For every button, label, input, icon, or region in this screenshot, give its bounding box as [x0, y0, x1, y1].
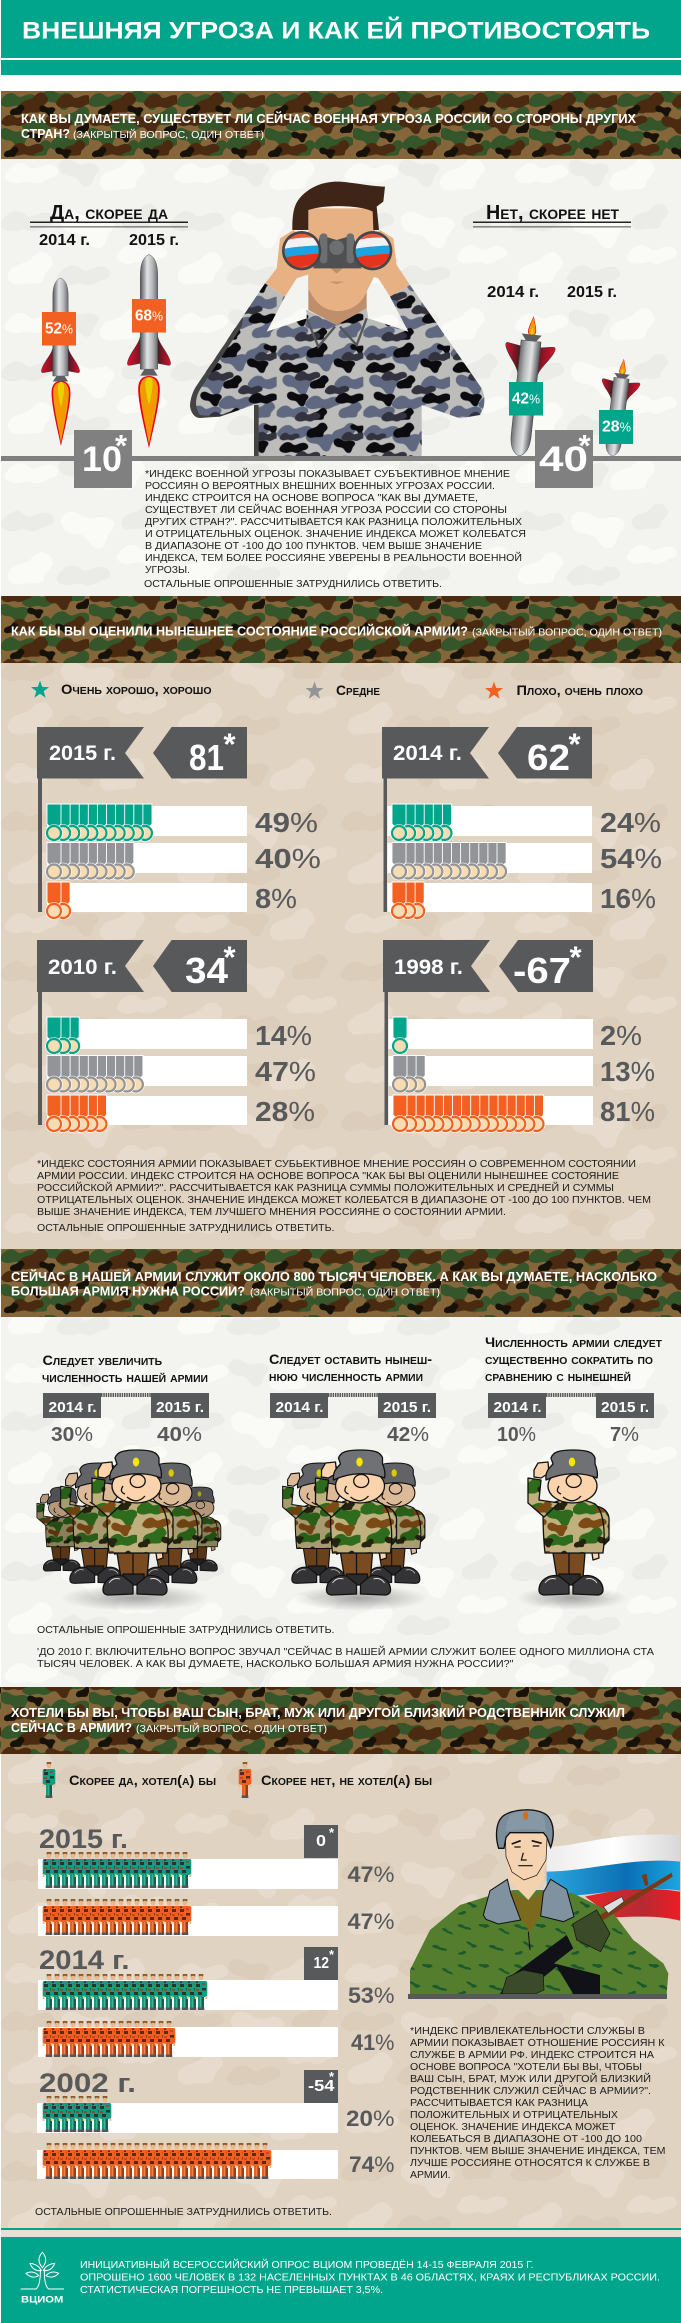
chart: 1998 rating: 2% — [600, 1020, 642, 1051]
soldiers group: three soldiers — [283, 1450, 428, 1611]
legend: no — [239, 1762, 432, 1798]
column: keep army: нюю численность армии — [269, 1368, 423, 1384]
chart: 2015 relative serving: * — [329, 1825, 335, 1840]
section 1 camouflage heading band: КАК ВЫ ДУМАЕТЕ, СУЩЕСТВУЕТ ЛИ СЕЙЧАС ВОЕННАЯ УГРОЗА РОССИИ СО СТОРОНЫ ДРУГИХ — [21, 111, 636, 126]
footnote: army index: АРМИИ РОССИИ. ИНДЕКС СТРОИТСЯ НА ОСНОВЕ ВОПРОСА "КАК БЫ ВЫ ОЦЕНИЛИ НЫНЕШНЕЕ СОСТОЯНИЕ — [37, 1171, 619, 1182]
footnote: threat index: И ОТРИЦАТЕЛЬНЫХ ОЦЕНОК. ЗНАЧЕНИЕ ИНДЕКСА МОЖЕТ КОЛЕБАТСЯ — [145, 529, 526, 540]
footnote: army size — [37, 1625, 654, 1670]
answer heading: yes: 2015 г. — [129, 232, 179, 249]
footnote: threat index: ИНДЕКС СТРОИТСЯ НА ОСНОВЕ ВОПРОСА "КАК ВЫ ДУМАЕТЕ, — [145, 493, 478, 504]
footnote: attractiveness index: ОЦЕНОК. ЗНАЧЕНИЕ ИНДЕКСА МОЖЕТ — [410, 2122, 616, 2133]
footnote: threat index: РОССИЯН О ВЕРОЯТНЫХ ВНЕШНИХ ВОЕННЫХ УГРОЗАХ РОССИИ. — [145, 481, 495, 492]
footer — [1, 2228, 681, 2323]
chart: 2010 rating: 14% — [255, 1020, 312, 1051]
section 1 camouflage heading band — [1, 91, 681, 159]
survey information: СТАТИСТИЧЕСКАЯ ПОГРЕШНОСТЬ НЕ ПРЕВЫШАЕТ 3,5%. — [80, 2284, 383, 2296]
rocket 2015 no 28% — [593, 356, 643, 458]
panel: section 4 relative serving — [0, 1687, 681, 2228]
column: reduce army: существенно сократить по — [485, 1351, 653, 1367]
footnote: threat index: УГРОЗЫ. — [145, 565, 190, 576]
footnote: army index: ВЫШЕ ЗНАЧЕНИЕ ИНДЕКСА, ТЕМ ЛУЧШЕГО МНЕНИЯ РОССИЯНЕ О СОСТОЯНИИ АРМИИ. — [37, 1207, 506, 1218]
chart: 2015 relative serving: 2015 г. — [39, 1824, 128, 1854]
footnote: attractiveness index: ПУНКТОВ. ЧЕМ ВЫШЕ ЗНАЧЕНИЕ ИНДЕКСА, ТЕМ — [410, 2146, 666, 2157]
section 4 camouflage heading band — [0, 1687, 681, 1754]
column: reduce army: Численность армии следует — [485, 1334, 662, 1350]
footnote: army index — [37, 1159, 651, 1234]
chart: 2014 rating: 24% — [600, 807, 661, 838]
section 3 camouflage heading band: СЕЙЧАС В НАШЕЙ АРМИИ СЛУЖИТ ОКОЛО 800 ТЫСЯЧ ЧЕЛОВЕК. А КАК ВЫ ДУМАЕТЕ, НАСКОЛЬКО — [11, 1269, 657, 1284]
chart: 2014 relative serving: 53% — [348, 1983, 394, 2008]
survey information — [80, 2258, 660, 2296]
footnote: army index: ОТРИЦАТЕЛЬНЫХ ОЦЕНОК. ЗНАЧЕНИЕ ИНДЕКСА МОЖЕТ КОЛЕБАТСЯ В ДИАПАЗОНЕ ОТ -100 ДО 100 ПУНКТОВ. ЧЕМ — [37, 1195, 651, 1206]
column: increase army: 40% — [157, 1424, 202, 1446]
column: increase army: 2015 г. — [156, 1399, 204, 1416]
header banner — [1, 0, 681, 75]
chart: 2015 rating: 2015 г. — [49, 742, 116, 765]
medals row: good 14% — [46, 1017, 81, 1054]
chart: 2015 relative serving: 47% — [348, 1909, 394, 1934]
chart: 2015 relative serving: 47% — [348, 1862, 394, 1887]
footnote: attractiveness index: АРМИИ. — [410, 2170, 450, 2181]
footnote: army index: *ИНДЕКС СОСТОЯНИЯ АРМИИ ПОКАЗЫВАЕТ СУБЬЕКТИВНОЕ МНЕНИЕ РОССИЯН О СОВРЕМЕННОМ СОСТОЯНИИ — [37, 1159, 636, 1170]
legend: army rating: Средне — [336, 682, 380, 698]
footnote: army size: ОСТАЛЬНЫЕ ОПРОШЕННЫЕ ЗАТРУДНИЛИСЬ ОТВЕТИТЬ. — [37, 1625, 334, 1636]
medals row: good 24% — [390, 804, 453, 842]
illustration: soldier with flag and rifle — [410, 1810, 680, 1994]
people row: no 47% — [43, 1899, 191, 1935]
icon: VCIOM logo — [21, 2252, 64, 2304]
footnote: attractiveness index — [410, 2026, 666, 2181]
column: keep army — [269, 1351, 436, 1446]
chart: 2015 rating — [37, 726, 321, 920]
chart: 2014 relative serving: 12 — [314, 1955, 329, 1972]
logo wordmark: ВЦИОМ — [21, 2294, 63, 2304]
chart: 2010 rating: 2010 г. — [48, 956, 117, 979]
survey information: ИНИЦИАТИВНЫЙ ВСЕРОССИЙСКИЙ ОПРОС ВЦИОМ ПРОВЕДЁН 14-15 ФЕВРАЛЯ 2015 Г. — [80, 2258, 534, 2271]
chart: 2002 relative serving: 2002 г. — [39, 2068, 136, 2098]
title: ВНЕШНЯЯ УГРОЗА И КАК ЕЙ ПРОТИВОСТОЯТЬ — [22, 16, 650, 44]
footnote: threat index: ДРУГИХ СТРАН?". РАССЧИТЫВАЕТСЯ КАК РАЗНИЦА ПОЛОЖИТЕЛЬНЫХ — [145, 517, 522, 528]
chart: 2014 rating — [382, 726, 662, 920]
column: increase army: 2014 г. — [48, 1399, 96, 1416]
chart: 2014 rating: 2014 г. — [393, 742, 462, 765]
column: increase army: Следует увеличить — [42, 1352, 162, 1368]
column: reduce army: 7% — [610, 1424, 639, 1446]
rocket 2015 yes 68%: 68% — [135, 308, 163, 324]
illustration: man with binoculars — [190, 182, 484, 456]
chart: 1998 rating: 81% — [600, 1096, 655, 1127]
chart: 2015 rating: 81 — [189, 737, 224, 778]
chart: 2014 relative serving: 2014 г. — [39, 1945, 130, 1975]
footnote: attractiveness index: РАССЧИТЫВАЕТСЯ КАК РАЗНИЦА — [410, 2098, 588, 2109]
panel: section 1 military threat — [1, 91, 681, 596]
footnote: threat index: СУЩЕСТВУЕТ ЛИ СЕЙЧАС ВОЕННАЯ УГРОЗА РОССИИ СО СТОРОНЫ — [145, 503, 507, 516]
answer heading: no — [473, 202, 631, 301]
medals row: good 49% — [46, 804, 154, 842]
people row: no 74% — [43, 2143, 271, 2179]
medals row: bad 16% — [390, 882, 426, 920]
section 3 camouflage heading band — [1, 1249, 681, 1317]
column: keep army: 42% — [387, 1424, 429, 1446]
chart: 2014 relative serving: 41% — [351, 2030, 394, 2055]
legend: no: Скорее нет, не хотел(а) бы — [261, 1772, 432, 1788]
footnote: threat index: *ИНДЕКС ВОЕННОЙ УГРОЗЫ ПОКАЗЫВАЕТ СУБЪЕКТИВНОЕ МНЕНИЕ — [145, 467, 510, 480]
section 1 camouflage heading band: СТРАН? — [21, 126, 70, 141]
medals row: bad 81% — [392, 1095, 545, 1132]
survey information: ОПРОШЕНО 1600 ЧЕЛОВЕК В 132 НАСЕЛЕННЫХ ПУНКТАХ В 46 ОБЛАСТЯХ, КРАЯХ И РЕСПУБЛИКАХ РОССИИ. — [80, 2272, 660, 2284]
section 4 camouflage heading band: СЕЙЧАС В АРМИИ? — [11, 1720, 132, 1735]
medals row: average 40% — [46, 842, 135, 880]
chart: 2015 rating: 40% — [255, 843, 321, 874]
people row: yes 20% — [43, 2096, 111, 2132]
footnote: threat index — [144, 467, 526, 590]
chart: 2010 rating: 28% — [255, 1096, 315, 1127]
medals row: average 47% — [46, 1056, 144, 1093]
index box 40 — [535, 428, 593, 488]
chart: 2015 rating: 8% — [255, 883, 297, 914]
footnote: attractiveness index: ВАШ СЫН, БРАТ, МУЖ ИЛИ ДРУГОЙ БЛИЗКИЙ — [410, 2072, 651, 2085]
answer heading: no: 2014 г. — [487, 284, 539, 301]
chart: 2014 rating: 16% — [600, 883, 656, 914]
chart: 2010 rating: 34 — [185, 950, 228, 991]
chart: 2002 relative serving: 20% — [346, 2106, 394, 2131]
panel: section 2 army condition — [1, 596, 681, 1249]
legend: army rating: Очень хорошо, хорошо — [61, 681, 212, 697]
chart: 2002 relative serving — [37, 2068, 394, 2179]
column: increase army: численность нашей армии — [42, 1369, 208, 1385]
chart: 1998 rating: -67 — [513, 950, 571, 991]
rocket 2015 no 28%: 28% — [602, 418, 631, 436]
rocket 2015 yes 68% — [127, 254, 171, 448]
footnote: attractiveness index: *ИНДЕКС ПРИВЛЕКАТЕЛЬНОСТИ СЛУЖБЫ В — [410, 2026, 645, 2037]
rocket 2014 yes 52%: 52% — [45, 320, 73, 338]
medals row: bad 28% — [46, 1095, 108, 1132]
chart: 2015 rating: 49% — [255, 807, 318, 838]
chart: 1998 rating — [383, 940, 655, 1132]
section 2 camouflage heading band — [1, 596, 681, 663]
footnote: attractiveness index: РОДСТВЕННИК СЛУЖИЛ СЕЙЧАС В АРМИИ?". — [410, 2084, 651, 2097]
index box 10: * — [115, 428, 128, 463]
medals row: good 2% — [392, 1017, 408, 1054]
footnote: attractiveness index: ОСНОВЕ ВОПРОСА "ХОТЕЛИ БЫ ВЫ, ЧТОБЫ — [410, 2062, 642, 2073]
legend: army rating — [31, 680, 643, 699]
people row: yes 47% — [43, 1852, 191, 1888]
column: reduce army: 10% — [497, 1424, 536, 1446]
footnote: army index: РОССИЙСКОЙ АРМИИ?". РАССЧИТЫВАЕТСЯ КАК РАЗНИЦА СУММЫ ПОЛОЖИТЕЛЬНЫХ И СРЕДНЕЙ И СУММЫ — [37, 1181, 614, 1194]
index box 40: * — [578, 428, 592, 463]
chart: 2002 relative serving: * — [329, 2069, 335, 2084]
medals row: average 13% — [392, 1056, 427, 1093]
column: keep army: Следует оставить нынеш- — [269, 1351, 432, 1367]
chart: 2002 relative serving: -54 — [308, 2078, 335, 2095]
column: reduce army: 2014 г. — [494, 1399, 542, 1416]
column: increase army: 30% — [51, 1424, 93, 1446]
chart: 2014 relative serving: * — [329, 1947, 335, 1962]
footnote: attractiveness index: АРМИИ ПОКАЗЫВАЕТ ОТНОШЕНИЕ РОССИЯН К — [410, 2038, 665, 2049]
note: remaining respondents: ОСТАЛЬНЫЕ ОПРОШЕННЫЕ ЗАТРУДНИЛИСЬ ОТВЕТИТЬ. — [35, 2207, 332, 2218]
ground line — [1, 456, 681, 461]
rocket 2014 yes 52% — [41, 278, 80, 446]
chart: 2002 relative serving: 74% — [349, 2152, 394, 2177]
chart: 2015 relative serving: 0 — [316, 1833, 326, 1850]
medals row: average 54% — [390, 842, 508, 880]
column: reduce army — [485, 1334, 662, 1446]
footnote: army size: ТЫСЯЧ ЧЕЛОВЕК. А КАК ВЫ ДУМАЕТЕ, НАСКОЛЬКО БОЛЬШАЯ АРМИЯ НУЖНА РОССИИ?" — [37, 1659, 514, 1670]
chart: 2014 rating: * — [568, 726, 582, 762]
section 3 camouflage heading band: (ЗАКРЫТЫЙ ВОПРОС, ОДИН ОТВЕТ) — [250, 1286, 440, 1298]
footnote: attractiveness index: КОЛЕБАТЬСЯ В ДИАПАЗОНЕ ОТ -100 ДО 100 — [410, 2134, 642, 2145]
chart: 1998 rating: * — [570, 940, 582, 974]
answer heading: no: 2015 г. — [567, 284, 617, 301]
section 2 camouflage heading band: (ЗАКРЫТЫЙ ВОПРОС, ОДИН ОТВЕТ) — [472, 626, 662, 638]
column: reduce army: сравнению с нынешней — [485, 1368, 631, 1384]
chart: 2010 rating — [37, 940, 316, 1132]
answer heading: yes: 2014 г. — [39, 232, 90, 249]
panel: section 3 army size — [1, 1249, 681, 1687]
footnote: attractiveness index: ПОЛОЖИТЕЛЬНЫХ И ОТРИЦАТЕЛЬНЫХ — [410, 2110, 618, 2121]
rocket 2014 no 42% — [494, 313, 558, 459]
chart: 1998 rating: 13% — [600, 1056, 655, 1087]
index box 10: 10 — [82, 440, 122, 479]
legend: yes — [43, 1762, 216, 1798]
footnote: attractiveness index: СЛУЖБЕ В АРМИИ РФ. ИНДЕКС СТРОИТСЯ НА — [410, 2050, 654, 2061]
footnote: army index: ОСТАЛЬНЫЕ ОПРОШЕННЫЕ ЗАТРУДНИЛИСЬ ОТВЕТИТЬ. — [37, 1223, 334, 1234]
footnote: threat index: ИНДЕКСА, ТЕМ БОЛЕЕ РОССИЯНЕ УВЕРЕНЫ В РЕАЛЬНОСТИ ВОЕННОЙ — [145, 551, 522, 564]
chart: 2014 rating: 62 — [527, 737, 570, 778]
people row: yes 53% — [43, 1974, 207, 2010]
footnote: army size: 'ДО 2010 Г. ВКЛЮЧИТЕЛЬНО ВОПРОС ЗВУЧАЛ "СЕЙЧАС В НАШЕЙ АРМИИ СЛУЖИТ БОЛЕЕ ОДНОГО МИЛЛИОНА СТА — [37, 1645, 654, 1658]
section 4 camouflage heading band: ХОТЕЛИ БЫ ВЫ, ЧТОБЫ ВАШ СЫН, БРАТ, МУЖ ИЛИ ДРУГОЙ БЛИЗКИЙ РОДСТВЕННИК СЛУЖИЛ — [11, 1705, 625, 1720]
people row: no 41% — [43, 2021, 175, 2057]
rocket 2014 no 42%: 42% — [512, 390, 540, 408]
ledge below soldier — [408, 1994, 667, 1999]
column: keep army: 2015 г. — [383, 1399, 431, 1416]
section 3 camouflage heading band: БОЛЬШАЯ АРМИЯ НУЖНА РОССИИ? — [11, 1284, 245, 1298]
legend: yes: Скорее да, хотел(а) бы — [69, 1772, 216, 1788]
column: reduce army: 2015 г. — [601, 1399, 649, 1416]
soldiers group: five soldiers — [37, 1450, 221, 1611]
index box 40: 40 — [539, 440, 588, 479]
column: increase army — [42, 1352, 209, 1446]
medals row: bad 8% — [46, 882, 72, 920]
column: keep army: 2014 г. — [276, 1399, 324, 1416]
answer heading: yes — [30, 202, 188, 249]
chart: 2014 rating: 54% — [600, 843, 662, 874]
answer heading: yes: Да, скорее да — [50, 202, 168, 224]
chart: 2010 rating: 47% — [255, 1056, 316, 1087]
soldier: single — [517, 1450, 627, 1610]
section 4 camouflage heading band: (ЗАКРЫТЫЙ ВОПРОС, ОДИН ОТВЕТ) — [136, 1722, 327, 1735]
chart: 1998 rating: 1998 г. — [394, 956, 463, 979]
section 1 camouflage heading band: (ЗАКРЫТЫЙ ВОПРОС, ОДИН ОТВЕТ) — [73, 128, 264, 141]
footnote: threat index: В ДИАПАЗОНЕ ОТ -100 ДО 100 ПУНКТОВ. ЧЕМ ВЫШЕ ЗНАЧЕНИЕ — [145, 541, 482, 552]
footnote: threat index: ОСТАЛЬНЫЕ ОПРОШЕННЫЕ ЗАТРУДНИЛИСЬ ОТВЕТИТЬ. — [144, 579, 442, 590]
footnote: attractiveness index: ЛУЧШЕ РОССИЯНЕ ОТНОСЯТСЯ К СЛУЖБЕ В — [410, 2158, 650, 2169]
index box 10 — [74, 428, 132, 488]
answer heading: no: Нет, скорее нет — [486, 202, 619, 224]
chart: 2015 relative serving — [38, 1824, 394, 1936]
legend: army rating: Плохо, очень плохо — [516, 682, 643, 698]
chart: 2014 relative serving — [38, 1945, 394, 2057]
chart: 2010 rating: * — [224, 940, 236, 974]
chart: 2015 rating: * — [224, 726, 236, 762]
section 2 camouflage heading band: КАК БЫ ВЫ ОЦЕНИЛИ НЫНЕШНЕЕ СОСТОЯНИЕ РОССИЙСКОЙ АРМИИ? — [11, 624, 468, 638]
